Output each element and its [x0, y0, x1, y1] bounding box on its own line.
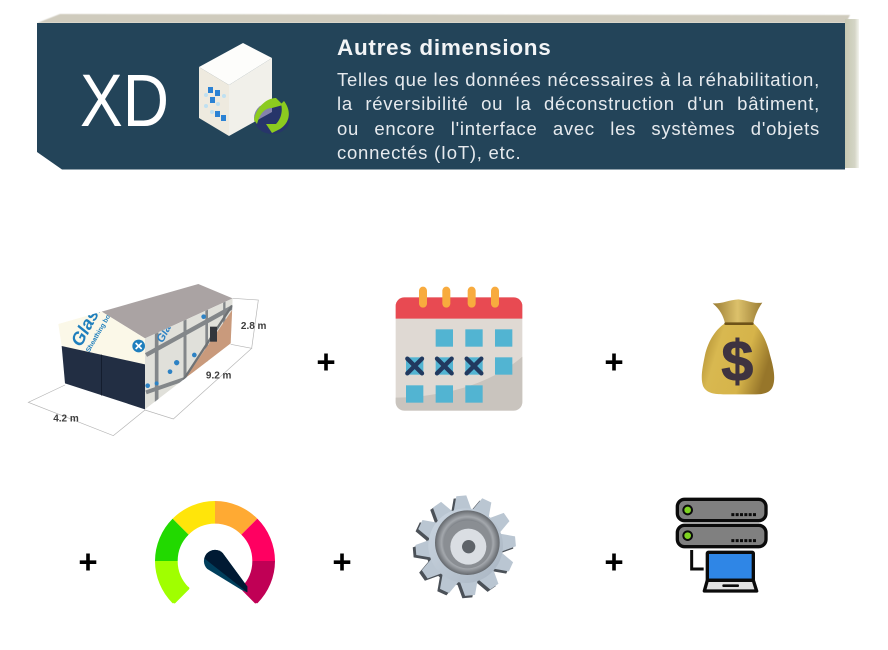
heading: Autres dimensions: Autres dimensions: [337, 35, 551, 60]
banner: XD autres dimensions: [37, 14, 859, 170]
XD label: XD: [80, 59, 169, 142]
plus sign 2: +: [604, 343, 624, 380]
side wall: [145, 298, 233, 409]
plus sign 4: +: [332, 543, 352, 580]
description text: ou encore l'interface avec les systèmes d'objets: [337, 118, 820, 139]
dimension labels: 2.8 m: [241, 321, 267, 332]
icons and plus signs: [28, 284, 774, 604]
plus sign 1: +: [316, 343, 336, 380]
dimension labels: [53, 321, 267, 425]
plus sign 5: +: [604, 543, 624, 580]
dimension labels: 9.2 m: [206, 370, 232, 381]
icon: money bag: $: [721, 330, 753, 394]
icon: building cube with recycle arrows: [199, 43, 290, 136]
front dark doors: [62, 346, 145, 409]
icon: calendar: [396, 287, 522, 411]
icon: speedometer gauge: [155, 501, 275, 603]
icon: servers and laptop: [677, 499, 766, 591]
icon: 3D building with dimensions: [28, 281, 267, 436]
description text: Telles que les données nécessaires à la réhabilitation,: [337, 69, 820, 90]
dimension lines: [28, 298, 258, 436]
description text: la réversibilité ou la déconstruction d'un bâtiment,: [337, 93, 820, 114]
description text: [337, 69, 820, 163]
plus sign 3: +: [78, 543, 98, 580]
description text: connectés (IoT), etc.: [337, 142, 521, 163]
icon: 3D building with dimensions: Sheathing board: [85, 305, 117, 354]
dimension labels: 4.2 m: [53, 414, 79, 425]
icon: gear: [409, 491, 520, 602]
side wall: Gla: [155, 323, 174, 345]
gauge needle: [204, 550, 247, 592]
roof: [102, 284, 233, 338]
front wall gable: [58, 312, 145, 364]
icon: 3D building with dimensions: Glasroc: [67, 281, 116, 350]
icon: money bag: [702, 299, 774, 394]
